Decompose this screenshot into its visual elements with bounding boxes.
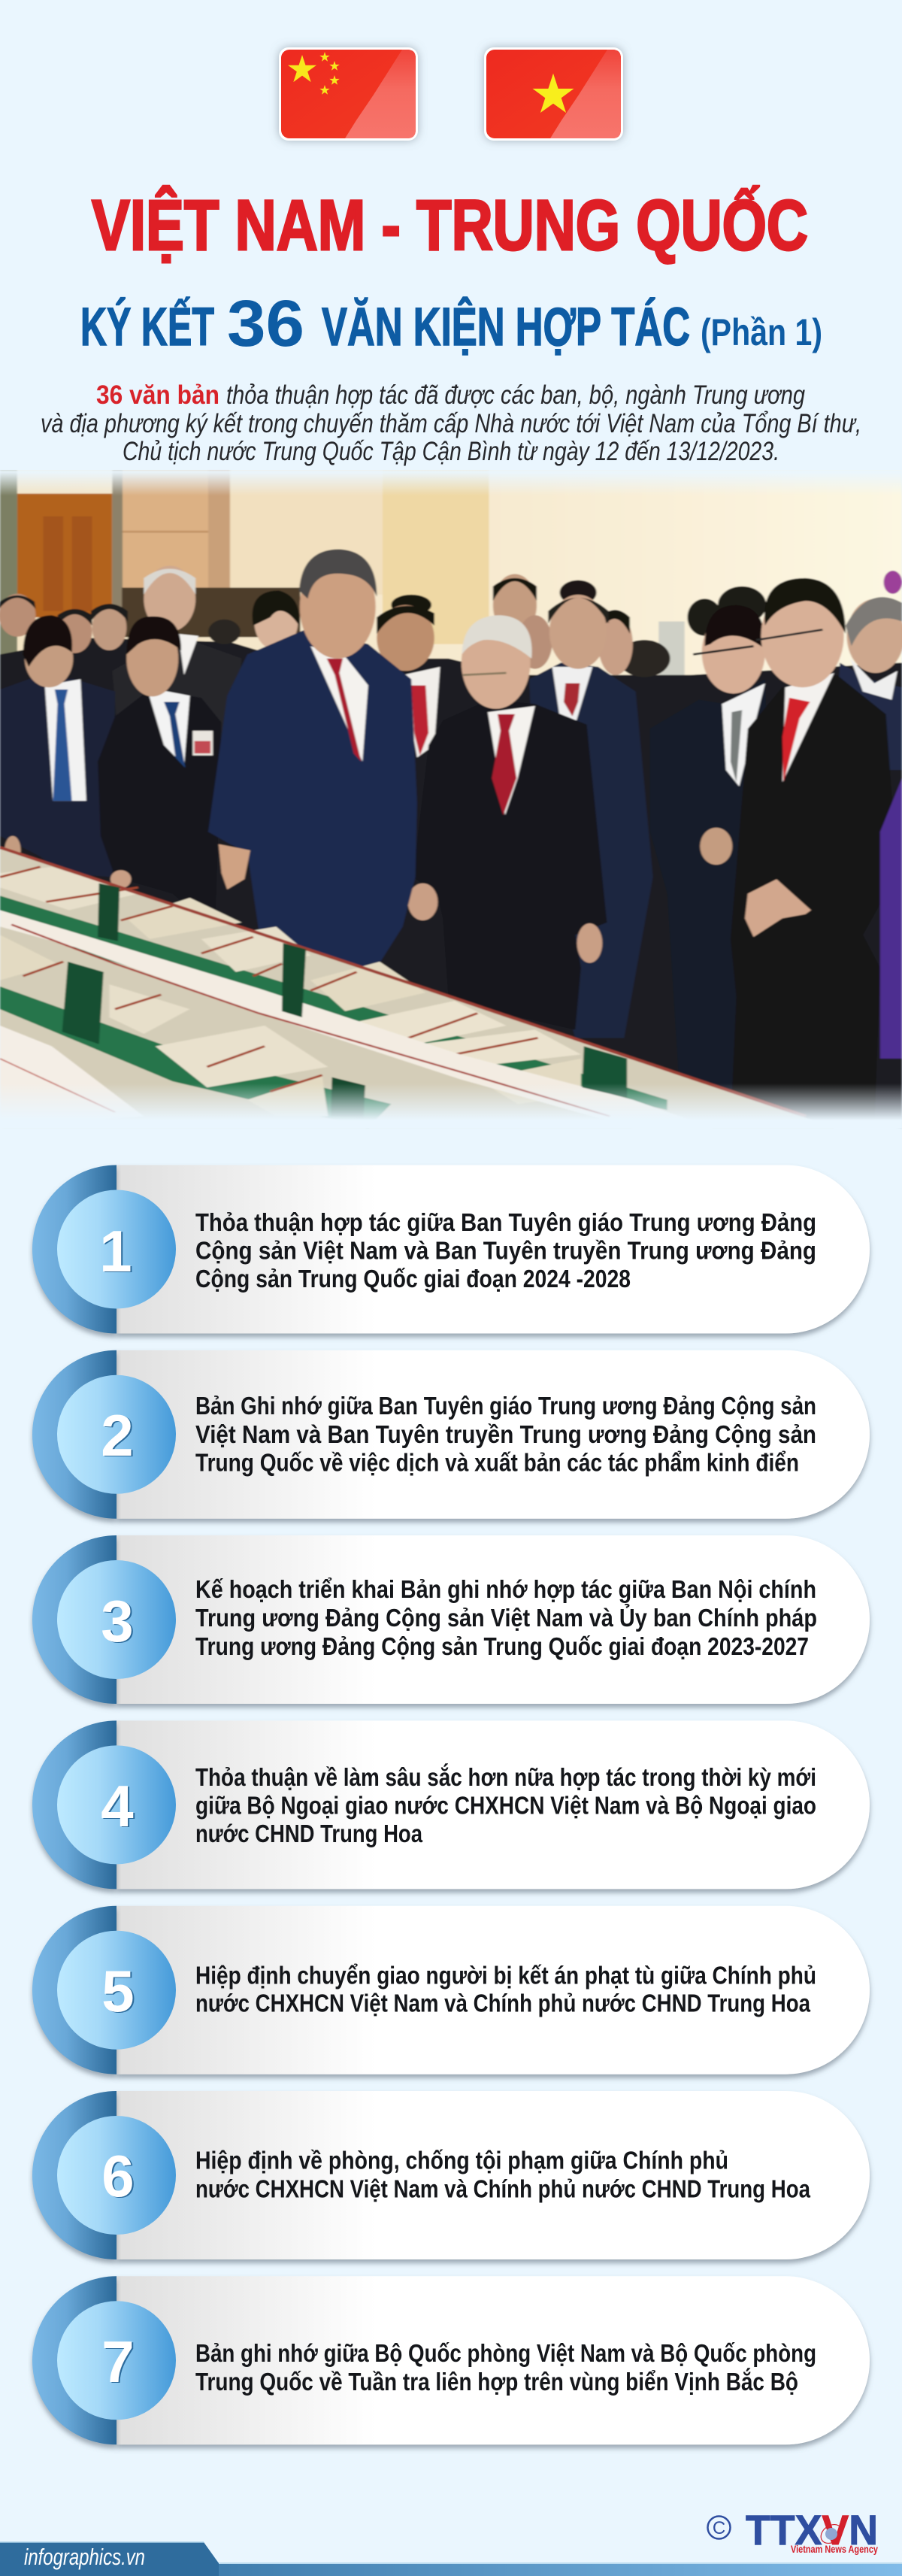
white pages front — [0, 1026, 144, 1128]
white rail — [0, 910, 713, 1128]
photo bottom fade — [0, 1083, 902, 1120]
green bands — [0, 896, 667, 1110]
card 1 — [32, 1165, 870, 1334]
card 1: Cộng sản Trung Quốc giai đoạn 2024 -2028 — [195, 1265, 631, 1293]
card 2 — [32, 1350, 870, 1519]
dark green panels — [98, 883, 120, 941]
card 4: nước CHND Trung Hoa — [195, 1820, 423, 1847]
card 3: 3 — [101, 1588, 134, 1654]
man with glasses, centre right — [650, 679, 771, 1100]
card 7: 7 — [101, 2329, 135, 2395]
card 1: Cộng sản Việt Nam và Ban Tuyên truyền Trung ương Đảng — [195, 1236, 816, 1265]
card 1: 1 — [99, 1218, 132, 1284]
subtitle: (Phần 1) — [701, 311, 822, 353]
card 6: 6 — [101, 2143, 135, 2209]
right front man — [731, 675, 897, 1125]
card 6: Hiệp định về phòng, chống tội phạm giữa Chính phủ — [195, 2147, 728, 2174]
card 6 — [32, 2091, 870, 2259]
card 2: Trung Quốc về việc dịch và xuất bản các tác phẩm kinh điển — [195, 1448, 799, 1477]
subtitle: 36 — [227, 287, 304, 360]
card 4: 4 — [101, 1773, 134, 1839]
card 5: 5 — [101, 1958, 135, 2024]
card 3: Trung ương Đảng Cộng sản Việt Nam và Ủy ban Chính pháp — [195, 1604, 817, 1632]
man top right — [847, 599, 902, 673]
documents lower row — [0, 935, 58, 980]
icon: China flag — [279, 47, 418, 141]
card 3: Trung ương Đảng Cộng sản Trung Quốc giai đoạn 2023-2027 — [195, 1632, 809, 1660]
card 2: Việt Nam và Ban Tuyên truyền Trung ương Đảng Cộng sản — [195, 1420, 816, 1448]
subtitle: KÝ KẾT — [80, 298, 214, 357]
photo: delegation viewing the signed documents — [0, 471, 902, 1129]
logo: copyright and TTXVN: TTXVN — [746, 2506, 878, 2553]
back crowd — [0, 638, 902, 1128]
man behind centre — [529, 662, 653, 1038]
man far left — [0, 677, 115, 877]
card 3 — [32, 1535, 870, 1704]
card 3: Kế hoạch triển khai Bản ghi nhớ hợp tác giữa Ban Nội chính — [195, 1575, 816, 1603]
card 2: 2 — [101, 1402, 134, 1468]
subtitle — [80, 287, 822, 360]
intro text — [41, 380, 861, 466]
card 7 — [32, 2276, 870, 2444]
purple dress — [880, 778, 902, 1059]
card 5 — [32, 1906, 870, 2074]
card 4 — [32, 1720, 870, 1889]
card 7: Trung Quốc về Tuần tra liên hợp trên vùng biển Vịnh Bắc Bộ — [195, 2368, 798, 2396]
intro text: 36 văn bản — [96, 380, 219, 410]
footer band: infographics.vn — [24, 2544, 145, 2570]
man behind left of centre — [368, 659, 472, 984]
photo top fade — [0, 471, 902, 496]
subtitle: VĂN KIỆN HỢP TÁC — [322, 297, 690, 357]
footer band — [0, 2542, 902, 2576]
red ribbons — [0, 867, 538, 1092]
logo: copyright and TTXVN: C — [713, 2518, 725, 2538]
man with blue tie — [98, 689, 222, 918]
documents upper row — [0, 867, 138, 910]
logo: copyright and TTXVN: Vietnam News Agency — [791, 2543, 878, 2555]
Vietnamese leader — [413, 700, 607, 1030]
Chinese leader — [208, 629, 417, 972]
icon: Vietnam flag — [484, 47, 623, 141]
display table base — [0, 847, 834, 1128]
card 1: Thỏa thuận hợp tác giữa Ban Tuyên giáo Trung ương Đảng — [195, 1208, 816, 1236]
